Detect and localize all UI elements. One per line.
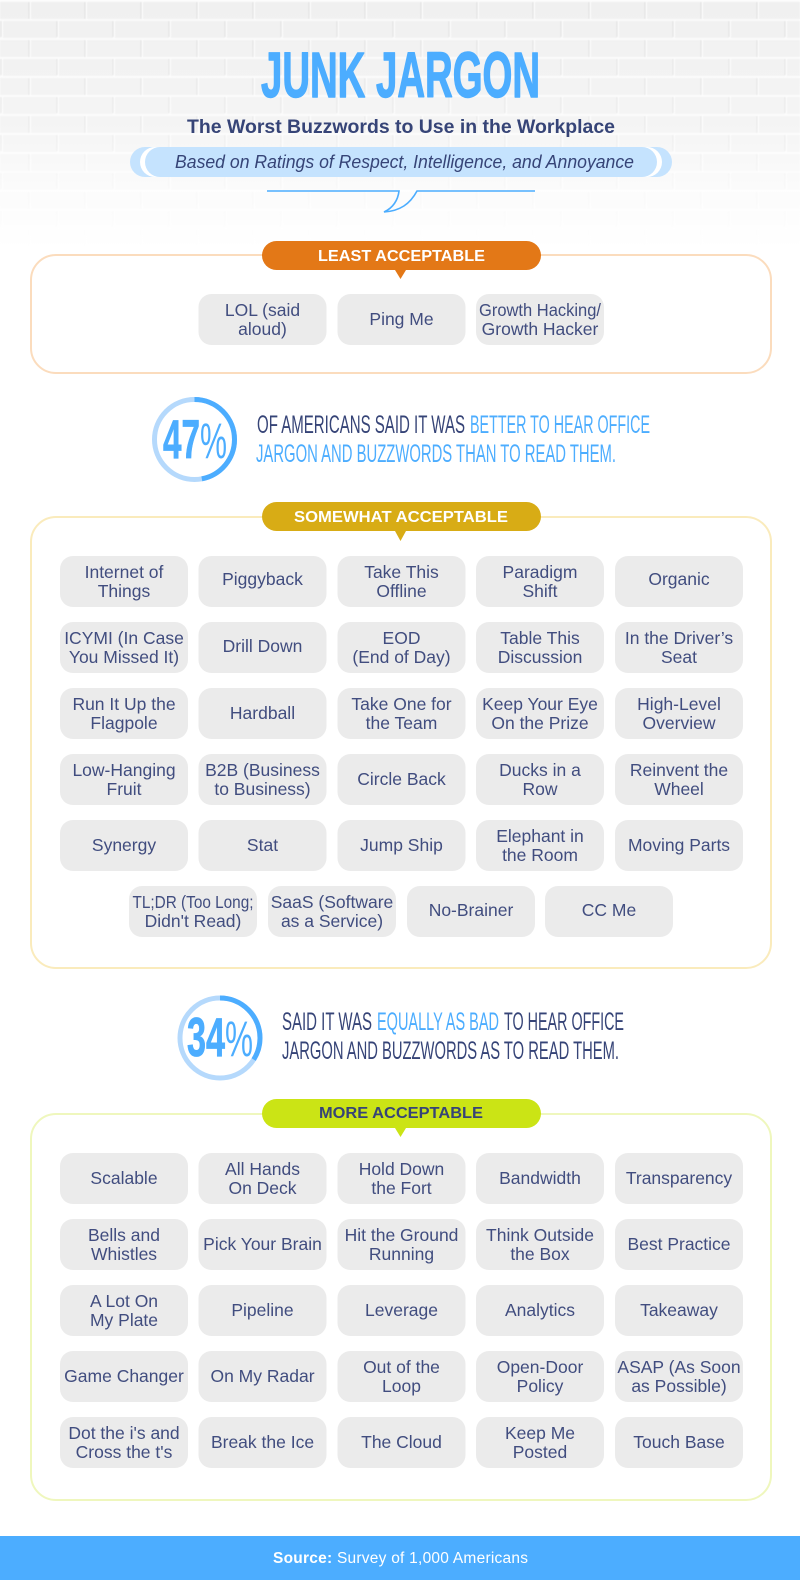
chip: Take One for the Team (338, 688, 466, 739)
chip: Hit the Ground Running: Running (369, 1244, 434, 1264)
chip: Organic: Organic (648, 569, 710, 589)
chip: Game Changer: Game Changer (64, 1366, 184, 1386)
chip: Growth Hacking: Growth Hacker (482, 319, 599, 339)
chip: Ducks in a Row: Ducks in a (499, 760, 581, 780)
chip: Jump Ship (338, 820, 466, 871)
chip: Break the Ice: Break the Ice (211, 1432, 314, 1452)
chip: A Lot On My Plate: A Lot On (90, 1291, 158, 1311)
banner: based on ratings: Based on Ratings of Respect, Intelligence, and Annoyance (175, 152, 634, 172)
heading pill (262, 502, 541, 541)
panel: least acceptable (31, 241, 771, 373)
chip: Circle Back: Circle Back (357, 769, 446, 789)
chip: Takeaway: Takeaway (640, 1300, 718, 1320)
panel: somewhat acceptable (31, 502, 771, 968)
stat text (256, 411, 650, 468)
chip: Hold Down the Fort: the Fort (371, 1178, 432, 1198)
chip: Elephant in the Room: the Room (502, 845, 578, 865)
title: JUNK JARGON (261, 39, 540, 111)
chip: Low-Hanging Fruit: Low-Hanging (72, 760, 176, 780)
chip: Scalable (60, 1153, 188, 1204)
chip: ASAP (615, 1351, 743, 1402)
chip: The Cloud (338, 1417, 466, 1468)
chip: Keep Me Posted: Keep Me (505, 1423, 575, 1443)
chip: Elephant in the Room (476, 820, 604, 871)
chip: SaaS (268, 886, 396, 937)
chip: Bells and Whistles: Bells and (88, 1225, 160, 1245)
chip: Internet of Things: Internet of (85, 562, 164, 582)
chip: Table This Discussion (476, 622, 604, 673)
heading pill (262, 241, 541, 279)
heading pill: MORE ACCEPTABLE (319, 1105, 483, 1122)
chip: Paradigm Shift (476, 556, 604, 607)
chip: High-Level Overview (615, 688, 743, 739)
chip: Out of the Loop: Loop (382, 1376, 421, 1396)
panel border (31, 255, 771, 373)
chip: Out of the Loop (338, 1351, 466, 1402)
chip: Growth Hacking: Growth Hacking/ (479, 300, 601, 320)
chip: Leverage: Leverage (365, 1300, 438, 1320)
chip: Organic (615, 556, 743, 607)
chip: Circle Back (338, 754, 466, 805)
stat: 47 percent (154, 400, 650, 480)
chip: Table This Discussion: Table This (500, 628, 580, 648)
ring chart 47%: % (200, 413, 227, 469)
ring chart 34% (180, 998, 260, 1078)
heading pill: LEAST ACCEPTABLE (318, 248, 485, 265)
chip: ICYMI: You Missed It) (69, 647, 179, 667)
chip: In the Driver's Seat (615, 622, 743, 673)
chip: Moving Parts: Moving Parts (628, 835, 730, 855)
chip: Piggyback: Piggyback (222, 569, 303, 589)
chip: Best Practice: Best Practice (627, 1234, 731, 1254)
chip: A Lot On My Plate: My Plate (90, 1310, 158, 1330)
chip: Ducks in a Row (476, 754, 604, 805)
heading pill: SOMEWHAT ACCEPTABLE (294, 509, 508, 526)
chip: Jump Ship: Jump Ship (360, 835, 443, 855)
chip: Pick Your Brain: Pick Your Brain (203, 1234, 322, 1254)
chip: Takeaway (615, 1285, 743, 1336)
chip: LOL (198, 294, 326, 345)
chip: Paradigm Shift: Paradigm (503, 562, 577, 582)
chip: Elephant in the Room: Elephant in (496, 826, 584, 846)
chip: Think Outside the Box (476, 1219, 604, 1270)
chip: No-Brainer (407, 886, 535, 937)
footer: source (0, 1536, 800, 1580)
chip: TL;DR: Didn't Read) (145, 911, 241, 931)
chip: Keep Your Eye On the Prize (476, 688, 604, 739)
chip: TL;DR (129, 886, 257, 937)
chip: Hit the Ground Running: Hit the Ground (345, 1225, 458, 1245)
chip: In the Driver's Seat: In the Driver’s (625, 628, 733, 648)
chip: Moving Parts (615, 820, 743, 871)
chip: ICYMI (60, 622, 188, 673)
chip: ASAP: as Possible) (631, 1376, 727, 1396)
chip: The Cloud: The Cloud (361, 1432, 442, 1452)
chip: Keep Your Eye On the Prize: Keep Your Eye (482, 694, 598, 714)
chip: Hardball: Hardball (230, 703, 295, 723)
subtitle: The Worst Buzzwords to Use in the Workplace (187, 117, 615, 138)
chip: All Hands On Deck (198, 1153, 326, 1204)
chip: ASAP: ASAP (As Soon (617, 1357, 741, 1377)
chip: Low-Hanging Fruit: Fruit (106, 779, 142, 799)
chip: Run It Up the Flagpole: Flagpole (90, 713, 158, 733)
chip: LOL: LOL (said (225, 300, 300, 320)
chip: Touch Base (615, 1417, 743, 1468)
chip: TL;DR: TL;DR (Too Long; (132, 892, 254, 912)
chip: Low-Hanging Fruit (60, 754, 188, 805)
chip: LOL: aloud) (238, 319, 287, 339)
banner: based on ratings (130, 147, 672, 177)
brick wall header background (0, 0, 800, 250)
chip: Hardball (198, 688, 326, 739)
chip: ICYMI: ICYMI (In Case (64, 628, 184, 648)
chip: B2B: to Business) (214, 779, 311, 799)
chip: Ping Me: Ping Me (369, 309, 434, 329)
chip: Piggyback (198, 556, 326, 607)
stat text: SAID IT WAS (282, 1008, 372, 1036)
chip: Analytics: Analytics (505, 1300, 575, 1320)
chip: Think Outside the Box: Think Outside (486, 1225, 594, 1245)
chip: Pipeline: Pipeline (231, 1300, 294, 1320)
chip: Run It Up the Flagpole (60, 688, 188, 739)
chip: Ping Me (338, 294, 466, 345)
footer: source: Source: Survey of 1,000 Americans (273, 1550, 528, 1567)
chip: Run It Up the Flagpole: Run It Up the (72, 694, 176, 714)
ring chart 47% (154, 400, 234, 480)
chip: Break the Ice (198, 1417, 326, 1468)
stat text: TO HEAR OFFICE (504, 1008, 624, 1036)
chip: Hit the Ground Running (338, 1219, 466, 1270)
chip: Take This Offline: Offline (376, 581, 427, 601)
chip: Stat (198, 820, 326, 871)
panel border (31, 517, 771, 968)
chip: Dot the i's (60, 1417, 188, 1468)
chip: Open-Door Policy: Policy (517, 1376, 564, 1396)
chip: Dot the i's: Dot the i's and (68, 1423, 180, 1443)
stat text: OF AMERICANS SAID IT WAS (257, 411, 465, 439)
chip: Touch Base: Touch Base (633, 1432, 725, 1452)
chip: B2B: B2B (Business (205, 760, 320, 780)
chip: Paradigm Shift: Shift (522, 581, 558, 601)
chip: Bells and Whistles: Whistles (91, 1244, 157, 1264)
chip: Out of the Loop: Out of the (363, 1357, 440, 1377)
chip: B2B (198, 754, 326, 805)
chip: All Hands On Deck: On Deck (228, 1178, 297, 1198)
chip: Bells and Whistles (60, 1219, 188, 1270)
heading pill (262, 1099, 541, 1137)
chip: Keep Me Posted: Posted (513, 1442, 567, 1462)
chip: In the Driver's Seat: Seat (661, 647, 697, 667)
chip: On My Radar (198, 1351, 326, 1402)
chip: Table This Discussion: Discussion (498, 647, 582, 667)
chip: Open-Door Policy: Open-Door (497, 1357, 583, 1377)
chip: Scalable: Scalable (90, 1168, 158, 1188)
chip: Take This Offline (338, 556, 466, 607)
chip: A Lot On My Plate (60, 1285, 188, 1336)
chip: EOD (338, 622, 466, 673)
chip: SaaS: as a Service) (281, 911, 383, 931)
panel: more acceptable (31, 1099, 771, 1500)
chip: Analytics (476, 1285, 604, 1336)
chip: Hold Down the Fort: Hold Down (359, 1159, 444, 1179)
chip: Drill Down (198, 622, 326, 673)
ring chart 34%: % (225, 1011, 253, 1067)
chip: Internet of Things (60, 556, 188, 607)
chip: Drill Down: Drill Down (223, 636, 302, 656)
chip: Transparency: Transparency (626, 1168, 732, 1188)
chip: Reinvent the Wheel: Wheel (654, 779, 704, 799)
chip: High-Level Overview: Overview (643, 713, 716, 733)
chip: Keep Me Posted (476, 1417, 604, 1468)
panel border (31, 1114, 771, 1500)
chip: Take This Offline: Take This (364, 562, 439, 582)
chip: Hold Down the Fort (338, 1153, 466, 1204)
chip: Growth Hacking (476, 294, 604, 345)
chip: EOD: (End of Day) (352, 647, 451, 667)
speech bubble line (267, 191, 535, 212)
stat text: BETTER TO HEAR OFFICE (470, 411, 650, 439)
chip: Ducks in a Row: Row (522, 779, 558, 799)
stat text (282, 1008, 624, 1065)
chip: Take One for the Team: the Team (366, 713, 437, 733)
chip: High-Level Overview: High-Level (637, 694, 721, 714)
chip: Stat: Stat (247, 835, 278, 855)
chip: Leverage (338, 1285, 466, 1336)
chip: Bandwidth (476, 1153, 604, 1204)
chip: Transparency (615, 1153, 743, 1204)
chip: CC Me: CC Me (582, 900, 636, 920)
stat: 34 percent (180, 998, 624, 1078)
chip: Keep Your Eye On the Prize: On the Prize (491, 713, 589, 733)
chip: Best Practice (615, 1219, 743, 1270)
chip: Open-Door Policy (476, 1351, 604, 1402)
chip: SaaS: SaaS (Software (271, 892, 393, 912)
chip: All Hands On Deck: All Hands (225, 1159, 300, 1179)
chip: Think Outside the Box: the Box (510, 1244, 570, 1264)
chip: Synergy: Synergy (92, 835, 156, 855)
chip: EOD: EOD (383, 628, 420, 648)
chip: Dot the i's: Cross the t's (76, 1442, 173, 1462)
stat text: EQUALLY AS BAD (377, 1008, 499, 1036)
chip: Pick Your Brain (198, 1219, 326, 1270)
chip: Game Changer (60, 1351, 188, 1402)
chip: No-Brainer: No-Brainer (429, 900, 513, 920)
chip: Internet of Things: Things (98, 581, 151, 601)
chip: CC Me (545, 886, 673, 937)
ring chart 34%: 34 (187, 1006, 225, 1068)
chip: Take One for the Team: Take One for (351, 694, 452, 714)
chip: Reinvent the Wheel: Reinvent the (630, 760, 728, 780)
chip: Reinvent the Wheel (615, 754, 743, 805)
chip: Synergy (60, 820, 188, 871)
chip: Bandwidth: Bandwidth (499, 1168, 581, 1188)
chip: Pipeline (198, 1285, 326, 1336)
ring chart 47%: 47 (163, 408, 200, 470)
chip: On My Radar: On My Radar (210, 1366, 315, 1386)
